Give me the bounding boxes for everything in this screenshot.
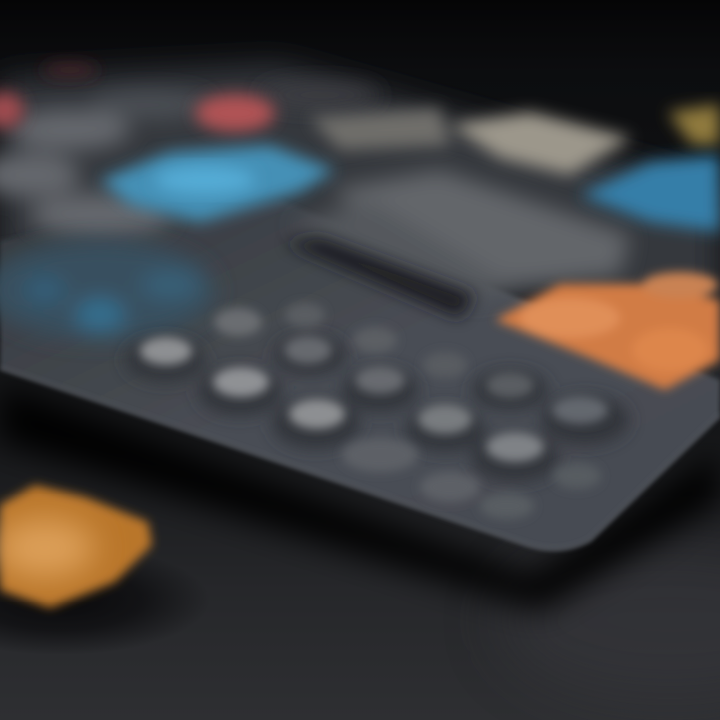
table highlight lower right [500, 540, 720, 700]
blue key left [100, 145, 335, 222]
display panel [290, 170, 630, 300]
blue-tinted key area [0, 240, 215, 340]
yellow key [668, 104, 720, 145]
cracker highlight [0, 518, 95, 578]
blue key left highlight [155, 166, 255, 194]
upper left key rows [0, 83, 380, 237]
red keys [0, 64, 275, 132]
grey number keys [140, 303, 608, 519]
calculator casing [0, 200, 720, 549]
orange cracker object [0, 485, 152, 608]
calculator: body [0, 64, 720, 549]
cracker base [0, 485, 152, 608]
dark key wells [125, 335, 629, 482]
display dark slot [285, 238, 475, 318]
calculator shadow [0, 385, 720, 610]
calculator top fading edge [0, 65, 720, 400]
calculator front edge [0, 368, 720, 549]
beige keys [310, 108, 632, 175]
blue key right [580, 155, 720, 232]
cookie shadow [0, 545, 210, 655]
orange keys [495, 272, 720, 390]
